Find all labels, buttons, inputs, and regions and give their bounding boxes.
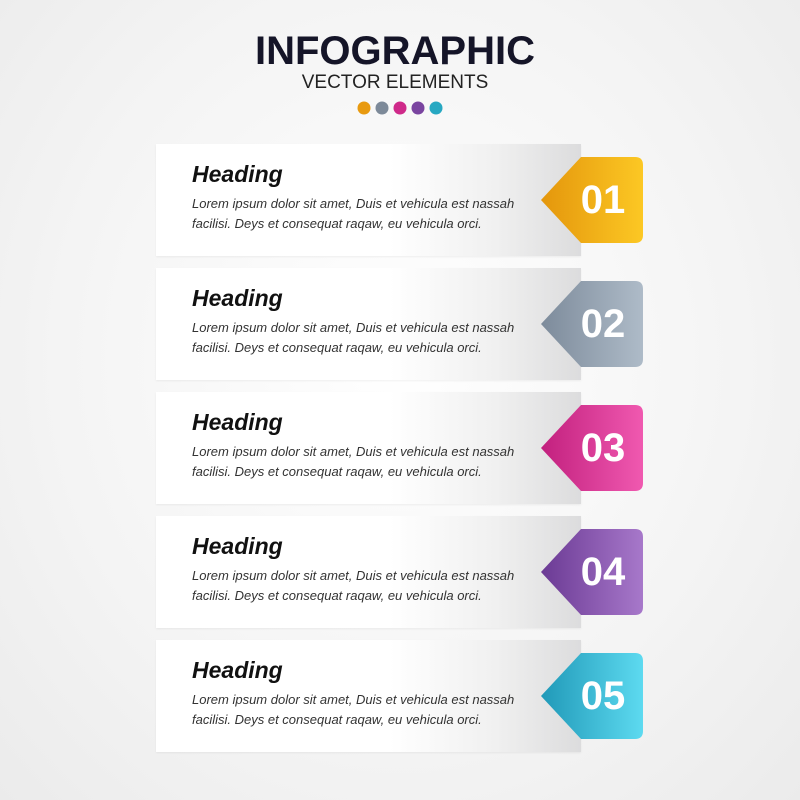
panel: item 02 xyxy=(156,268,643,380)
panel: item 05: Heading xyxy=(192,657,283,683)
panel: item 04 xyxy=(156,516,643,628)
number tag 05: 05 xyxy=(581,674,625,718)
number tag 05 xyxy=(541,653,643,739)
panel: item 04: facilisi. Deys et consequat raqaw, eu vehicula orci. xyxy=(192,588,482,603)
title: INFOGRAPHIC xyxy=(255,29,535,73)
number tag 01 xyxy=(541,157,643,243)
panel: item 03: Lorem ipsum dolor sit amet, Duis et vehicula est nassah xyxy=(192,444,514,459)
panel: item 01: Lorem ipsum dolor sit amet, Duis et vehicula est nassah xyxy=(192,196,514,211)
number tag 01: 01 xyxy=(581,178,625,222)
number tag 04: 04 xyxy=(581,550,625,594)
panel: item 03: Heading xyxy=(192,409,283,435)
number tag 03: 03 xyxy=(581,426,625,470)
panel: item 02: facilisi. Deys et consequat raqaw, eu vehicula orci. xyxy=(192,340,482,355)
number tag 03 xyxy=(541,405,643,491)
color dots xyxy=(358,102,442,114)
panel: item 04: Heading xyxy=(192,533,283,559)
number tag 02: 02 xyxy=(581,302,625,346)
panel: item 03 xyxy=(156,392,643,504)
panel: item 01 xyxy=(156,144,643,256)
panel: item 01: facilisi. Deys et consequat raqaw, eu vehicula orci. xyxy=(192,216,482,231)
number tag 04 xyxy=(541,529,643,615)
panel: item 02: Lorem ipsum dolor sit amet, Duis et vehicula est nassah xyxy=(192,320,514,335)
panel: item 01: Heading xyxy=(192,161,283,187)
number tag 02 xyxy=(541,281,643,367)
panel: item 05 xyxy=(156,640,643,752)
panel: item 05: Lorem ipsum dolor sit amet, Duis et vehicula est nassah xyxy=(192,692,514,707)
panel: item 04: Lorem ipsum dolor sit amet, Duis et vehicula est nassah xyxy=(192,568,514,583)
panel: item 02: Heading xyxy=(192,285,283,311)
panel: item 03: facilisi. Deys et consequat raqaw, eu vehicula orci. xyxy=(192,464,482,479)
subtitle: VECTOR ELEMENTS xyxy=(302,72,488,93)
panel: item 05: facilisi. Deys et consequat raqaw, eu vehicula orci. xyxy=(192,712,482,727)
